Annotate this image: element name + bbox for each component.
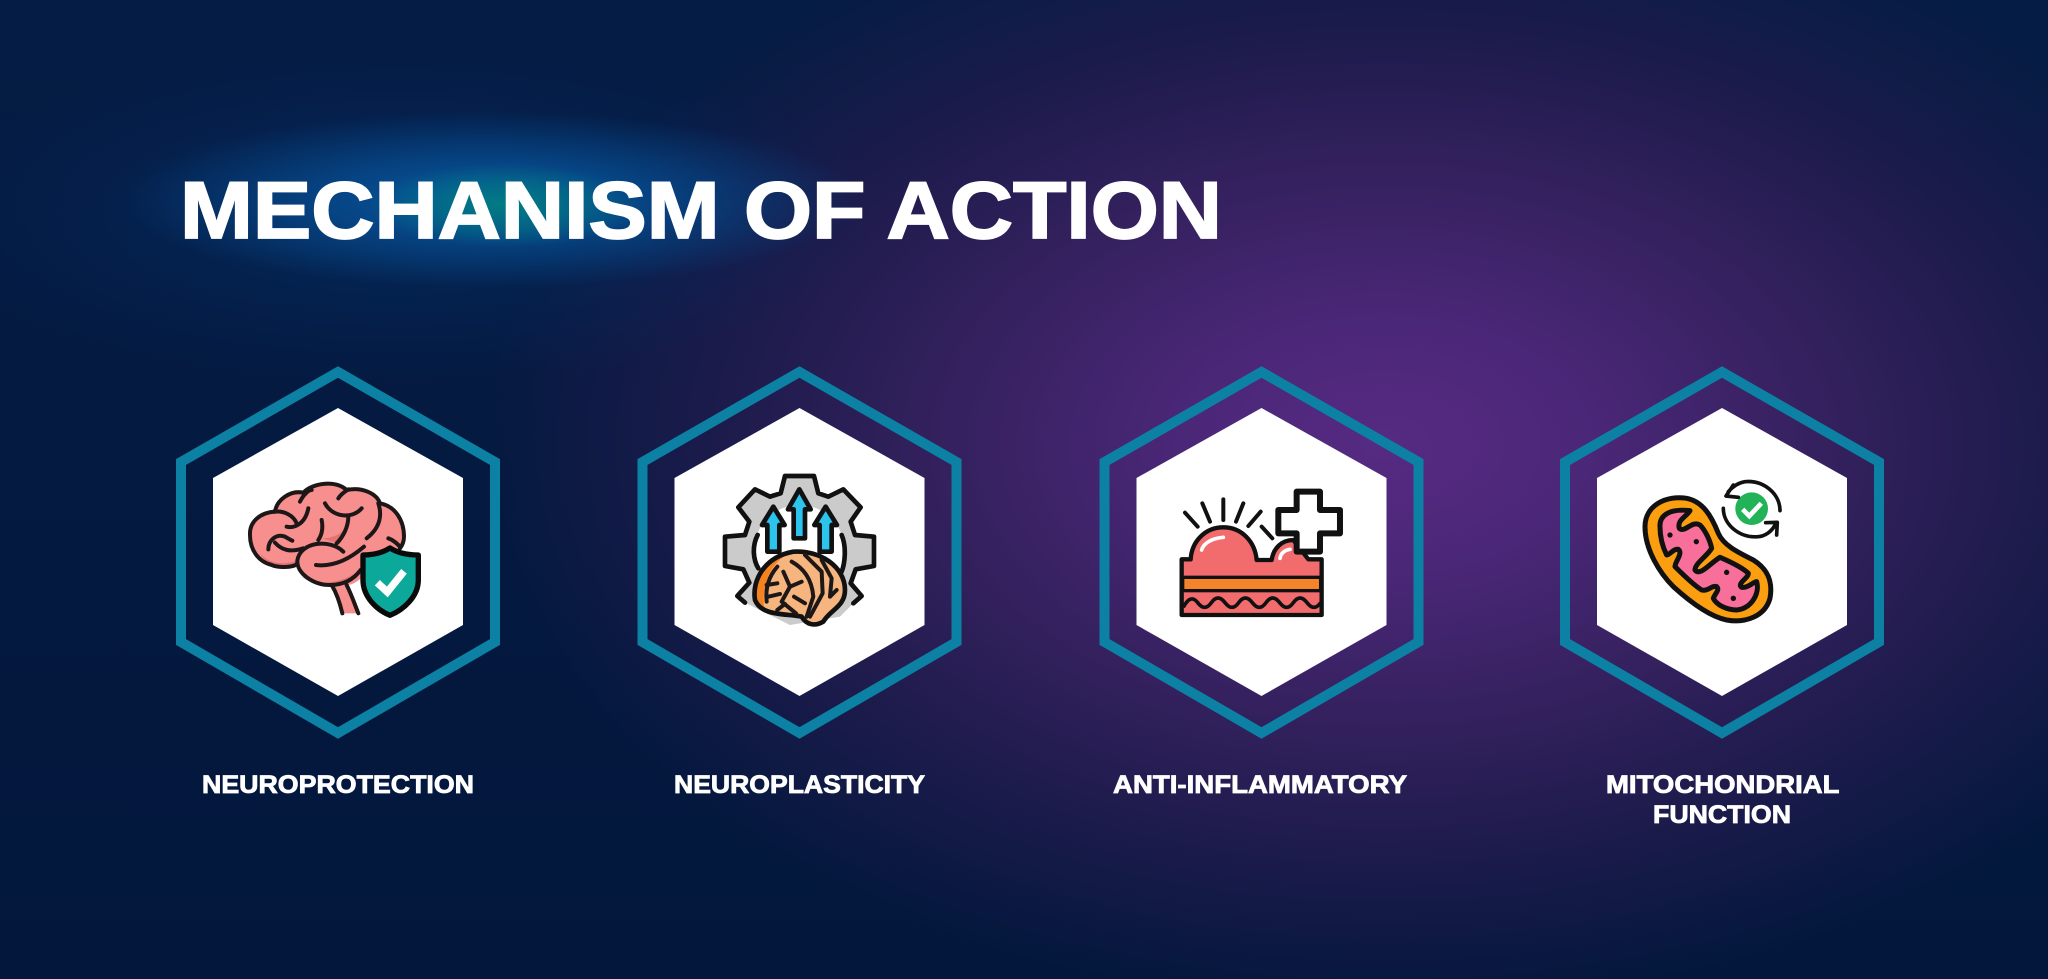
panel: neuroprotection <box>181 372 495 799</box>
label: mitochondrial function: MITOCHONDRIAL <box>1606 772 1839 799</box>
hexagon frame: neuroplasticity <box>642 372 956 733</box>
title: MECHANISM OF ACTION <box>180 166 1222 256</box>
icon: gear with brain and arrows <box>725 476 874 625</box>
label: neuroplasticity: NEUROPLASTICITY <box>674 772 925 799</box>
hexagon frame: anti-inflammatory <box>1104 372 1418 733</box>
panel: anti-inflammatory <box>1104 372 1418 799</box>
label: anti-inflammatory: ANTI-INFLAMMATORY <box>1113 772 1407 799</box>
icon: brain with shield <box>250 484 418 615</box>
hexagon frame: mitochondrial function <box>1565 372 1879 733</box>
label: neuroprotection: NEUROPROTECTION <box>202 772 474 799</box>
icon: inflamed skin with cross <box>1182 492 1340 615</box>
panel: mitochondrial function <box>1565 372 1879 829</box>
panel: neuroplasticity <box>642 372 956 799</box>
icon: mitochondrion with renewal arrows <box>1645 482 1780 621</box>
hexagon frame: neuroprotection <box>181 372 495 733</box>
label: mitochondrial function: FUNCTION <box>1653 802 1791 829</box>
